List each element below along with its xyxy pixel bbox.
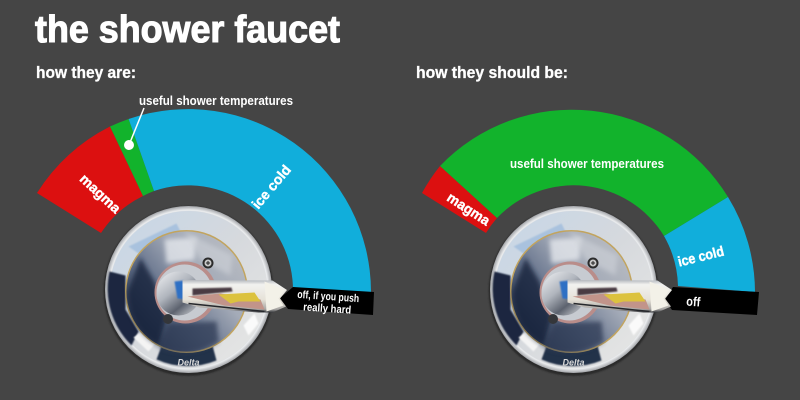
- gauge segment: useful temperatures: [110, 119, 154, 196]
- gauge segment: ice cold: [129, 109, 371, 292]
- callout: useful shower temperatures: useful shower temperatures: [139, 94, 293, 108]
- faucet photo: [488, 206, 672, 376]
- title: the shower faucet: [35, 9, 340, 51]
- gauge segment: useful temperatures: [440, 110, 728, 236]
- off marker: [665, 287, 759, 315]
- label: useful shower temperatures: useful shower temperatures: [510, 157, 664, 171]
- panel: how they are: [37, 94, 374, 376]
- label: magma: magma: [77, 170, 124, 216]
- label: off, if you push really hard: really hard: [303, 301, 352, 317]
- heading: how they are: how they are:: [36, 64, 136, 82]
- label: ice cold: ice cold: [248, 162, 294, 212]
- gauge segment: magma: [422, 166, 497, 233]
- callout: useful shower temperatures: [124, 94, 293, 150]
- label: ice cold: ice cold: [676, 243, 726, 270]
- heading: how they should be: how they should be:: [416, 64, 568, 82]
- gauge segment: magma: [37, 126, 143, 233]
- label: magma: magma: [444, 189, 493, 229]
- gauge segment: ice cold: [664, 197, 755, 292]
- label: off, if you push really hard: off, if you push: [297, 289, 360, 305]
- panel: how they should be: [422, 110, 759, 376]
- label: off, if you push really hard: [297, 289, 360, 317]
- faucet photo: Delta: [177, 358, 200, 368]
- label: off: off: [686, 294, 701, 310]
- faucet photo: [104, 206, 287, 376]
- off marker: [280, 287, 374, 315]
- faucet photo: Delta: [562, 358, 585, 368]
